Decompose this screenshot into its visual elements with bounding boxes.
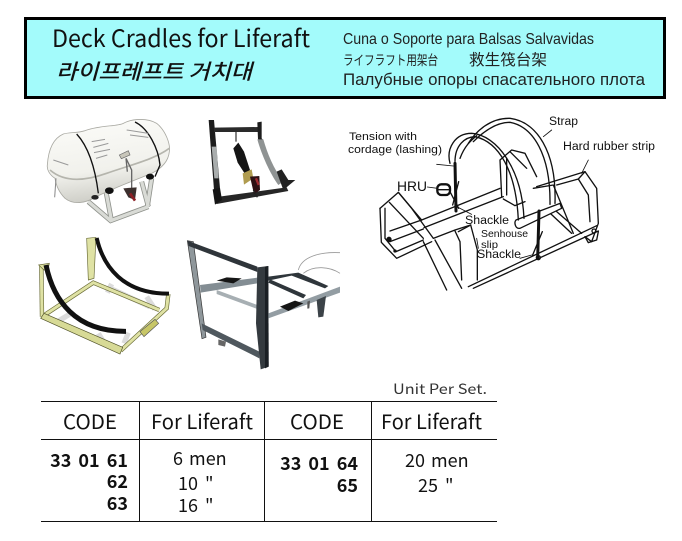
photo: dark frame cradle with HRU [209,120,295,205]
codes: second column: 33 01 64 [280,450,358,476]
sizes: second column [405,447,469,498]
front tube [515,203,562,228]
subtitle: Chinese: 救生筏台架 [469,51,547,69]
sizes: first column: 6 men [173,445,227,471]
codes: first column: 62 [107,468,128,494]
title: English: Deck Cradles for Liferaft [52,19,310,54]
right end frame [537,172,598,242]
sizes: first column: 16 " [178,492,214,518]
sizes: first column [173,445,227,518]
specification table [41,402,497,522]
label: HRU: HRU [397,178,427,194]
lower lashing [538,211,539,258]
label: tension: Tension with [349,131,417,143]
label: shackle lower: Shackle [477,247,521,261]
label: hard rubber strip: Hard rubber strip [563,141,655,153]
codes: first column: 33 01 61 [50,447,128,473]
column headers [63,406,482,435]
codes: second column: 65 [337,472,358,498]
left end frame [380,192,477,280]
codes: first column: 63 [107,490,128,516]
subtitle: Spanish: Cuna o Soporte para Balsas Salvavidas [343,31,594,48]
outer strap [468,118,555,203]
sizes: second column: 20 men [405,447,469,473]
unit note: Unit Per Set. [393,379,487,399]
column headers: CODE [63,406,117,435]
column headers: For Liferaft [151,406,253,435]
lashing [455,163,456,211]
HRU [437,184,450,195]
photo: liferaft canister on cradle [47,119,170,222]
cradle legs [88,178,152,222]
header banner [26,18,664,98]
label: senhouse: Senhouse [481,228,528,240]
codes: second column [280,450,358,498]
photo: olive cradle with black rubber strips [39,237,169,354]
photo: galvanised steel frame cradle [187,241,340,369]
codes: first column [50,447,128,516]
diagram labels [348,116,655,261]
side rails [422,188,503,228]
label: cordage: cordage (lashing) [348,144,442,156]
sizes: first column: 10 " [178,470,214,496]
column headers: For Liferaft [381,406,482,435]
title: Korean: 라이프레프트 거치대 [56,56,255,86]
subtitle: Japanese and Chinese: ライフラフト用架台 [343,53,438,68]
label: strap: Strap [549,116,578,128]
inner strap [449,133,524,218]
line drawing: cradle diagram [380,118,598,290]
label: shackle upper: Shackle [465,215,509,227]
subtitle: Russian: Палубные опоры спасательного плота [343,71,646,89]
leaders [427,130,588,258]
column headers: CODE [290,406,344,435]
central chock [500,150,537,197]
sizes: second column: 25 " [418,472,454,498]
label: slip: slip [481,239,498,251]
